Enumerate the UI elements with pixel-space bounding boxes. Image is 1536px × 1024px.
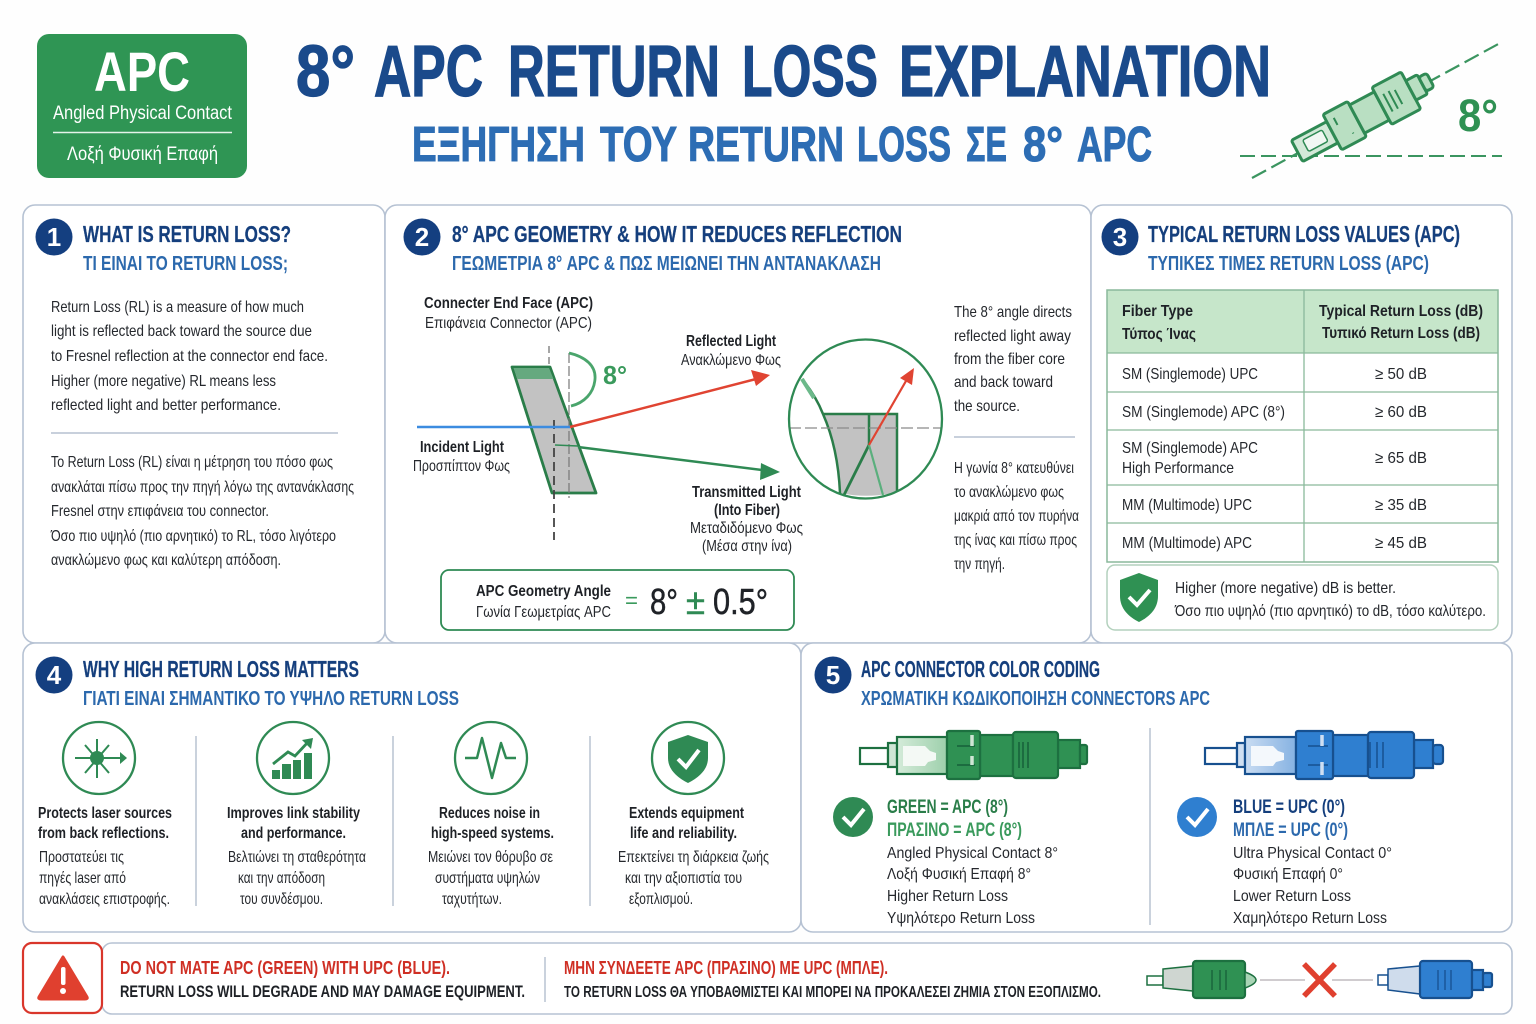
Greek warning <box>564 958 1101 1001</box>
table: return loss values: Typical Return Loss (dB) <box>1319 303 1483 320</box>
English warning: RETURN LOSS WILL DEGRADE AND MAY DAMAGE EQUIPMENT. <box>120 982 525 1001</box>
title: LOSS <box>742 32 878 112</box>
number badge 3: 3 <box>1113 222 1127 252</box>
Greek explanation: το ανακλώμενο φως <box>954 484 1064 501</box>
APC badge: Angled Physical Contact <box>53 103 233 124</box>
title: EXPLANATION <box>899 32 1271 112</box>
heading 1: WHAT IS RETURN LOSS? <box>83 221 291 247</box>
heading 5: ΧΡΩΜΑΤΙΚΗ ΚΩΔΙΚΟΠΟΙΗΣΗ CONNECTORS APC <box>861 688 1210 710</box>
green APC legend: Angled Physical Contact 8° <box>887 845 1058 862</box>
icon: green check <box>833 797 873 837</box>
heading 1 <box>83 221 291 275</box>
Greek description: Όσο πιο υψηλό (πιο αρνητικό) το RL, τόσο λιγότερο <box>50 528 336 545</box>
green APC legend: Υψηλότερο Return Loss <box>887 910 1035 927</box>
number badge 2 <box>404 218 440 256</box>
table: return loss values <box>1107 290 1498 562</box>
table: return loss values: ≥ 45 dB <box>1375 535 1427 552</box>
English description <box>51 299 328 414</box>
benefit: extends equipment life: εξοπλισμού. <box>629 891 693 908</box>
table: return loss values: ≥ 35 dB <box>1375 497 1427 514</box>
green APC legend <box>887 797 1058 927</box>
benefit: protects laser sources: from back reflections. <box>38 825 169 842</box>
benefit: extends equipment life <box>618 805 769 908</box>
icon: angled green connector <box>1240 42 1502 178</box>
subtitle: ΤΟΥ <box>600 118 677 172</box>
English description: to Fresnel reflection at the connector end face. <box>51 348 328 365</box>
English description: Higher (more negative) RL means less <box>51 373 276 390</box>
panel 4: why high return loss matters <box>23 643 801 932</box>
blue UPC legend: ΜΠΛΕ = UPC (0°) <box>1233 820 1348 841</box>
Greek explanation: την πηγή. <box>954 556 1005 573</box>
label: transmitted light: Μεταδιδόμενο Φως <box>690 520 803 537</box>
Greek description: ανακλάται πίσω προς την πηγή λόγω της αντανάκλασης <box>51 479 354 496</box>
benefit: protects laser sources <box>38 805 172 908</box>
callout: geometry angle: Γωνία Γεωμετρίας APC <box>476 604 611 621</box>
benefit: reduces noise: συστήματα υψηλών <box>435 870 540 887</box>
heading 5: APC CONNECTOR COLOR CODING <box>861 656 1100 682</box>
title: 8° <box>296 32 355 112</box>
table: return loss values: MM (Multimode) APC <box>1122 535 1252 552</box>
heading 2 <box>452 221 902 275</box>
heading 4 <box>83 656 459 710</box>
blue UPC legend: Lower Return Loss <box>1233 888 1351 905</box>
benefit: protects laser sources: Protects laser sources <box>38 805 172 822</box>
icon: warning triangle <box>23 943 102 1013</box>
table: return loss values: Τύπος Ίνας <box>1122 326 1196 343</box>
benefit: reduces noise: Reduces noise in <box>439 805 540 822</box>
blue UPC legend: BLUE = UPC (0°) <box>1233 797 1345 818</box>
table: return loss values: ≥ 65 dB <box>1375 450 1427 467</box>
English warning: DO NOT MATE APC (GREEN) WITH UPC (BLUE). <box>120 958 450 978</box>
callout: geometry angle <box>441 570 794 630</box>
warning banner <box>23 943 1512 1014</box>
number badge 4: 4 <box>47 660 62 690</box>
green APC legend: GREEN = APC (8°) <box>887 797 1008 818</box>
label: incident light: Προσπίπτον Φως <box>413 458 510 475</box>
table: return loss values: Fiber Type <box>1122 303 1193 320</box>
label: transmitted light: (Μέσα στην ίνα) <box>702 538 792 555</box>
green APC legend: ΠΡΑΣΙΝΟ = APC (8°) <box>887 820 1022 841</box>
benefit: protects laser sources: Προστατεύει τις <box>39 849 124 866</box>
label: transmitted light: Transmitted Light <box>692 484 802 501</box>
Greek description: Το Return Loss (RL) είναι η μέτρηση του πόσο φως <box>51 454 333 471</box>
label: transmitted light: (Into Fiber) <box>714 502 780 519</box>
English explanation <box>954 304 1072 415</box>
icon: blue UPC connector <box>1205 731 1443 779</box>
heading 4: ΓΙΑΤΙ ΕΙΝΑΙ ΣΗΜΑΝΤΙΚΟ ΤΟ ΥΨΗΛΟ RETURN LOSS <box>83 688 459 710</box>
icon: angled green connector: 8° <box>1458 90 1498 141</box>
icon: green APC connector <box>860 731 1087 779</box>
callout: geometry angle: ± <box>686 581 705 622</box>
English explanation: The 8° angle directs <box>954 304 1072 321</box>
benefit: reduces noise: Μειώνει τον θόρυβο σε <box>428 849 553 866</box>
icon: do not mate connectors <box>1147 961 1492 998</box>
APC badge: Λοξή Φυσική Επαφή <box>67 144 218 165</box>
heading 2: ΓΕΩΜΕΤΡΙΑ 8° APC & ΠΩΣ ΜΕΙΩΝΕΙ ΤΗΝ ΑΝΤΑΝΑΚΛΑΣΗ <box>452 253 881 275</box>
benefit: improves link stability: του συνδέσμου. <box>240 891 323 908</box>
callout: geometry angle: = <box>625 588 638 613</box>
table: return loss values: SM (Singlemode) UPC <box>1122 366 1258 383</box>
diagram: angled end face with light rays <box>417 346 780 540</box>
English explanation: reflected light away <box>954 328 1071 345</box>
icon: rising bars <box>257 722 329 794</box>
number badge 4 <box>36 656 72 694</box>
English warning <box>120 958 525 1001</box>
benefit: reduces noise: high-speed systems. <box>431 825 554 842</box>
English description: Return Loss (RL) is a measure of how much <box>51 299 304 316</box>
panel 1: what is return loss <box>23 205 385 643</box>
number badge 3 <box>1102 218 1138 256</box>
Greek explanation: της ίνας και πίσω προς <box>954 532 1077 549</box>
table: return loss values: SM (Singlemode) APC (8°) <box>1122 404 1285 421</box>
label: connector end face: Επιφάνεια Connector (APC) <box>425 315 592 332</box>
diagram: magnified end-face circle <box>789 340 942 498</box>
callout: geometry angle: 0.5° <box>713 581 768 622</box>
green APC legend: Higher Return Loss <box>887 888 1008 905</box>
number badge 1 <box>36 218 72 256</box>
benefit: improves link stability: Improves link stability <box>227 805 360 822</box>
heading 3 <box>1148 221 1460 275</box>
blue UPC legend <box>1233 797 1392 927</box>
blue UPC legend: Ultra Physical Contact 0° <box>1233 845 1392 862</box>
callout: higher dB is better: Higher (more negative) dB is better. <box>1175 580 1396 597</box>
Greek explanation: Η γωνία 8° κατευθύνει <box>954 460 1074 477</box>
English description: reflected light and better performance. <box>51 397 281 414</box>
heading 1: ΤΙ ΕΙΝΑΙ ΤΟ RETURN LOSS; <box>83 253 288 275</box>
callout: geometry angle: 8° <box>650 581 678 622</box>
title: APC <box>374 32 483 112</box>
English description: light is reflected back toward the source due <box>51 323 312 340</box>
benefit: improves link stability: and performance. <box>241 825 346 842</box>
benefit: extends equipment life: life and reliability. <box>630 825 737 842</box>
blue UPC legend: Φυσική Επαφή 0° <box>1233 866 1343 883</box>
label: reflected light: Reflected Light <box>686 333 777 350</box>
label: reflected light: Ανακλώμενο Φως <box>681 352 781 369</box>
subtitle: ΣΕ <box>966 118 1007 172</box>
diagram: angled end face with light rays: 8° <box>603 360 627 390</box>
panel 3: typical values <box>1091 205 1512 643</box>
APC badge: APC <box>94 40 190 103</box>
benefit: improves link stability: και την απόδοση <box>238 870 325 887</box>
English explanation: and back toward <box>954 374 1053 391</box>
Greek description <box>50 454 354 569</box>
benefit: extends equipment life: Επεκτείνει τη διάρκεια ζωής <box>618 849 769 866</box>
subtitle: APC <box>1077 118 1152 172</box>
heading 4: WHY HIGH RETURN LOSS MATTERS <box>83 656 359 682</box>
benefit: reduces noise <box>428 805 554 908</box>
heading 5 <box>861 656 1210 710</box>
benefit: reduces noise: ταχυτήτων. <box>442 891 502 908</box>
label: incident light <box>413 439 510 475</box>
number badge 5: 5 <box>826 660 840 690</box>
benefit: protects laser sources: πηγές laser από <box>39 870 126 887</box>
callout: higher dB is better <box>1107 565 1498 630</box>
Greek explanation <box>954 460 1079 573</box>
callout: geometry angle: APC Geometry Angle <box>476 583 611 600</box>
English explanation: from the fiber core <box>954 351 1065 368</box>
table: return loss values: Τυπικό Return Loss (dB) <box>1322 325 1480 342</box>
icon: shield <box>652 722 724 794</box>
table: return loss values: High Performance <box>1122 460 1234 477</box>
benefit: improves link stability: Βελτιώνει τη σταθερότητα <box>228 849 366 866</box>
icon: laser burst <box>63 722 135 794</box>
blue UPC legend: Χαμηλότερο Return Loss <box>1233 910 1387 927</box>
benefit: extends equipment life: Extends equipment <box>629 805 745 822</box>
Greek warning: ΤΟ RETURN LOSS ΘΑ ΥΠΟΒΑΘΜΙΣΤΕΙ ΚΑΙ ΜΠΟΡΕΙ ΝΑ ΠΡΟΚΑΛΕΣΕΙ ΖΗΜΙΑ ΣΤΟΝ ΕΞΟΠΛΙΣΜΟ. <box>564 984 1101 1001</box>
Greek description: ανακλώμενο φως και καλύτερη απόδοση. <box>51 552 281 569</box>
APC badge <box>37 34 247 178</box>
benefit: improves link stability <box>227 805 366 908</box>
number badge 2: 2 <box>415 222 429 252</box>
English explanation: the source. <box>954 398 1020 415</box>
Greek warning: ΜΗΝ ΣΥΝΔΕΕΤΕ APC (ΠΡΑΣΙΝΟ) ΜΕ UPC (ΜΠΛΕ). <box>564 958 888 978</box>
title: RETURN <box>508 32 720 112</box>
heading 2: 8° APC GEOMETRY & HOW IT REDUCES REFLECTION <box>452 221 902 247</box>
table: return loss values: ≥ 50 dB <box>1375 366 1427 383</box>
label: incident light: Incident Light <box>420 439 505 456</box>
subtitle: LOSS <box>857 118 951 172</box>
heading 3: ΤΥΠΙΚΕΣ ΤΙΜΕΣ RETURN LOSS (APC) <box>1148 253 1429 275</box>
panel 2: APC geometry <box>385 205 1091 643</box>
number badge 1: 1 <box>47 222 61 252</box>
label: connector end face: Connecter End Face (APC) <box>424 295 593 312</box>
label: reflected light <box>681 333 781 369</box>
benefit: extends equipment life: και την αξιοπιστία του <box>625 870 742 887</box>
table: return loss values: ≥ 60 dB <box>1375 404 1427 421</box>
Greek explanation: μακριά από τον πυρήνα <box>954 508 1079 525</box>
icon: blue check <box>1177 797 1217 837</box>
subtitle: 8° <box>1023 118 1063 172</box>
subtitle: RETURN <box>688 118 844 172</box>
label: connector end face <box>424 295 593 332</box>
number badge 5 <box>814 656 852 694</box>
Greek description: Fresnel στην επιφάνεια του connector. <box>51 503 269 520</box>
icon: noise pulse <box>455 722 527 794</box>
green APC legend: Λοξή Φυσική Επαφή 8° <box>887 866 1031 883</box>
subtitle: ΕΞΗΓΗΣΗ <box>412 118 585 172</box>
panel 5: connector color coding <box>801 643 1512 932</box>
table: return loss values: SM (Singlemode) APC <box>1122 440 1258 457</box>
subtitle <box>412 118 1152 172</box>
label: transmitted light <box>690 484 803 555</box>
benefit: protects laser sources: ανακλάσεις επιστροφής. <box>39 891 170 908</box>
table: return loss values: MM (Multimode) UPC <box>1122 497 1252 514</box>
title <box>296 32 1271 112</box>
